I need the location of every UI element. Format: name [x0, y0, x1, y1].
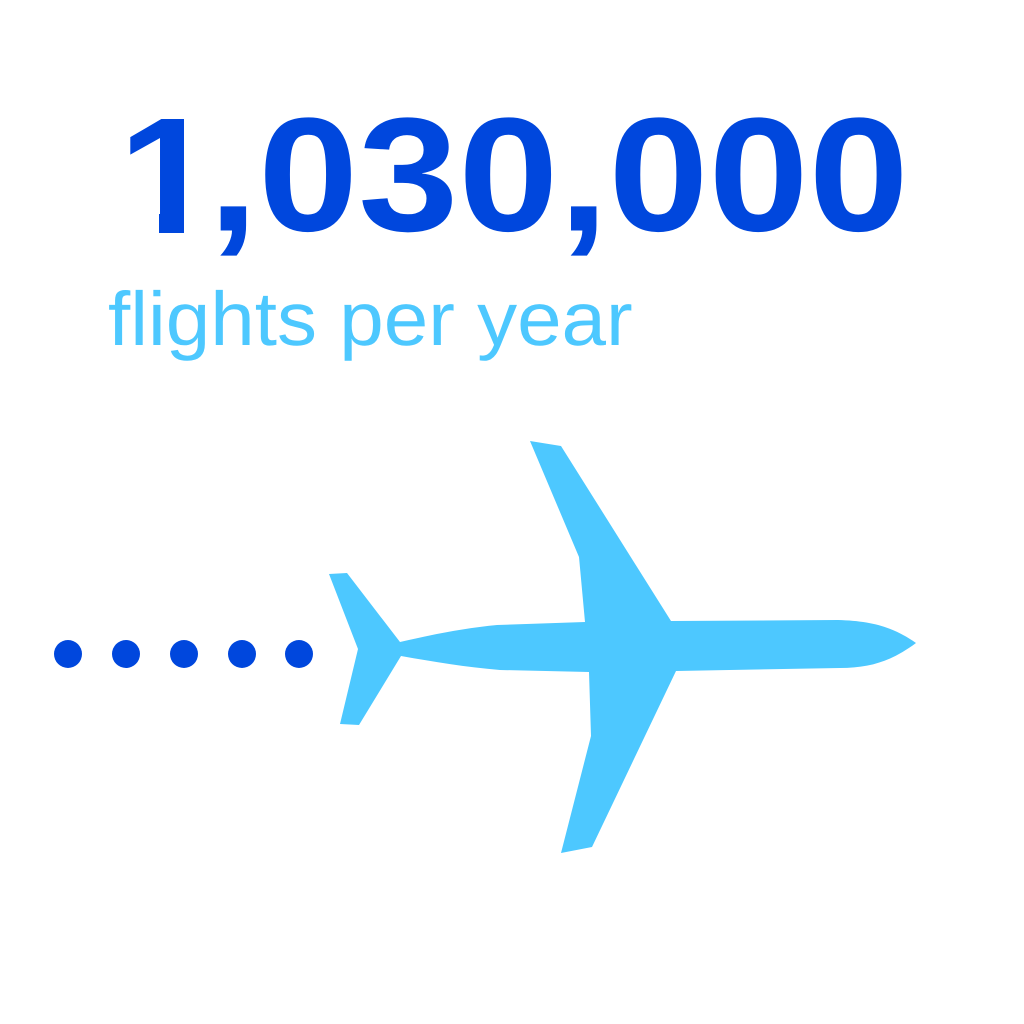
icon: airplane — [329, 441, 916, 853]
headline number: 1,030,000 — [118, 85, 909, 266]
subtitle: flights per year — [108, 277, 633, 361]
dotted flight trail — [54, 640, 313, 668]
